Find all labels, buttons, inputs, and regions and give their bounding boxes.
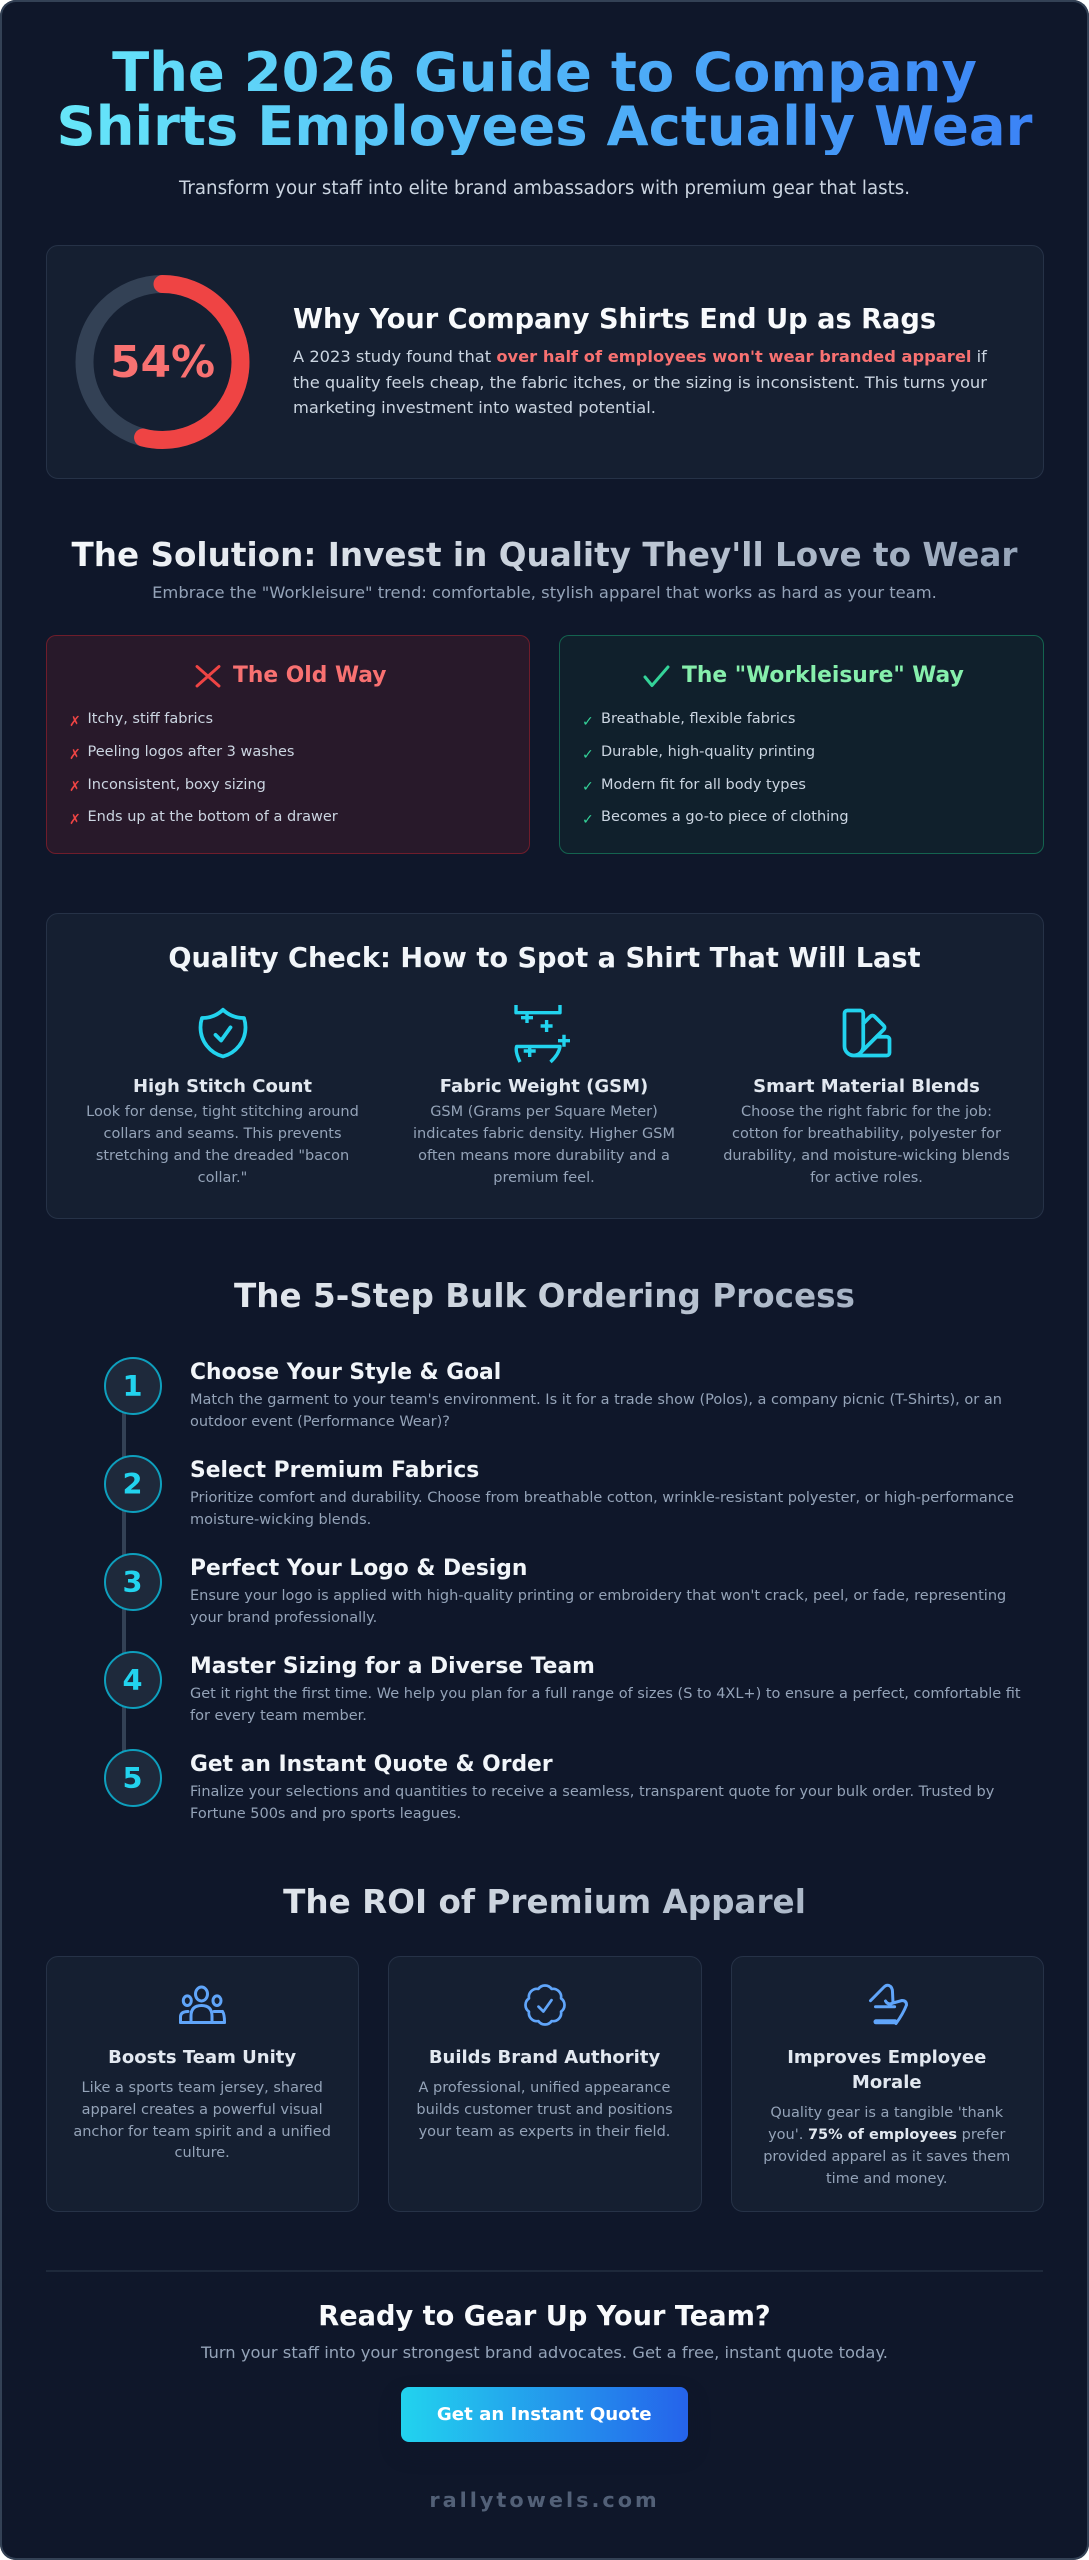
- list: old way items: ✗: [69, 779, 81, 795]
- list: workleisure items: ✓: [582, 779, 594, 795]
- text: boosts team unity description: culture.: [175, 2145, 230, 2161]
- text: smart material blends description: durability, and moisture-wicking blends: [723, 1148, 1010, 1164]
- list: workleisure items: [582, 711, 849, 828]
- icon: fabric weight: [514, 1005, 570, 1064]
- text: smart material blends description: for active roles.: [810, 1170, 923, 1186]
- text: fabric weight description: GSM (Grams per Square Meter): [430, 1104, 658, 1120]
- heading: why shirts end up as rags: Why Your Company Shirts End Up as Rags: [293, 304, 936, 335]
- heading: quality check: Quality Check: How to Spot a Shirt That Will Last: [168, 943, 921, 974]
- list: old way items: Peeling logos after 3 washes: [88, 744, 294, 760]
- chart: 54 percent ring: [76, 275, 250, 449]
- step 5: Finalize your selections and quantities to receive a seamless, transparent quote for your bulk order. Trusted by: [190, 1784, 994, 1800]
- icon: green check: [643, 665, 670, 688]
- heading: 5-step process: The 5-Step Bulk Ordering Process: [234, 1277, 855, 1315]
- text: high stitch count description: Look for dense, tight stitching around: [86, 1104, 359, 1120]
- text: smart material blends description: Choose the right fabric for the job:: [741, 1104, 992, 1120]
- text: smart material blends description: cotton for breathability, polyester for: [732, 1126, 1001, 1142]
- text: fabric weight description: often means more durability and a: [418, 1148, 670, 1164]
- list: workleisure items: ✓: [582, 714, 594, 730]
- card title: boosts team unity: Boosts Team Unity: [108, 2047, 296, 2068]
- list: old way items: ✗: [69, 714, 81, 730]
- text: builds brand authority description: A professional, unified appearance: [419, 2080, 670, 2096]
- list: workleisure items: Durable, high-quality printing: [601, 744, 815, 760]
- column: smart material blends: Smart Material Blends: [753, 1076, 980, 1097]
- step 2: Select Premium Fabrics: [190, 1458, 479, 1482]
- step 1: Choose Your Style & Goal: [190, 1360, 501, 1384]
- text: smart material blends description: [723, 1104, 1010, 1186]
- text: call to action subtitle: Turn your staff into your strongest brand advocates. Get a free, instant quote today.: [201, 2343, 888, 2362]
- card title: improves employee morale: Morale: [852, 2072, 922, 2093]
- text: solution subtitle: Embrace the "Workleisure" trend: comfortable, stylish apparel that works as hard as your team.: [152, 583, 937, 602]
- step 4: for every team member.: [190, 1708, 367, 1724]
- title: [46, 46, 1043, 154]
- text: improves employee morale description: time and money.: [826, 2171, 948, 2187]
- list: workleisure items: ✓: [582, 747, 594, 763]
- step 1: Match the garment to your team's environment. Is it for a trade show (Polos), a company picnic (T-Shirts), or an: [190, 1392, 1002, 1408]
- list: old way items: Itchy, stiff fabrics: [88, 711, 213, 727]
- list: workleisure items: Modern fit for all body types: [601, 777, 806, 793]
- list: old way items: [69, 711, 338, 828]
- text: problem description: [293, 347, 988, 417]
- heading: the solution: The Solution: Invest in Quality They'll Love to Wear: [72, 536, 1018, 574]
- text: high stitch count description: collars and seams. This prevents: [104, 1126, 342, 1142]
- step 1: outdoor event (Performance Wear)?: [190, 1414, 450, 1430]
- timeline connector: [122, 1386, 126, 1778]
- step 5: Fortune 500s and pro sports leagues.: [190, 1806, 461, 1822]
- list: workleisure items: Becomes a go-to piece of clothing: [601, 809, 849, 825]
- list: workleisure items: Breathable, flexible fabrics: [601, 711, 795, 727]
- card title: builds brand authority: Builds Brand Authority: [429, 2047, 660, 2068]
- footer: website: rallytowels.com: [429, 2488, 660, 2512]
- panel: the workleisure way: [559, 635, 1044, 854]
- step 2: moisture-wicking blends.: [190, 1512, 371, 1528]
- text: boosts team unity description: apparel creates a powerful visual: [82, 2102, 323, 2118]
- step 5: 5: [122, 1761, 143, 1795]
- title: The 2026 Guide to Company: [112, 41, 977, 104]
- column: high stitch count: High Stitch Count: [133, 1076, 312, 1097]
- text: improves employee morale description: [763, 2105, 1010, 2187]
- icon: thumbs up: [868, 1984, 908, 2026]
- step 4: Master Sizing for a Diverse Team: [190, 1654, 595, 1678]
- button: get an instant quote: Get an Instant Quote: [437, 2404, 652, 2425]
- list: old way items: Ends up at the bottom of a drawer: [88, 809, 338, 825]
- text: builds brand authority description: builds customer trust and positions: [416, 2102, 673, 2118]
- step 4: Get it right the first time. We help you plan for a full range of sizes (S to 4XL+) to ensure a perfect, comfortable fit: [190, 1686, 1021, 1702]
- step 3: Ensure your logo is applied with high-quality printing or embroidery that won't crack, peel, or fade, representing: [190, 1588, 1006, 1604]
- heading: the old way: The Old Way: [233, 663, 386, 688]
- panel: improves employee morale: [730, 1956, 1044, 2212]
- column: fabric weight: Fabric Weight (GSM): [440, 1076, 648, 1097]
- text: problem description: marketing investment into wasted potential.: [293, 398, 656, 417]
- card title: improves employee morale: Improves Employee: [787, 2047, 986, 2068]
- text: boosts team unity description: anchor for team spirit and a unified: [73, 2124, 331, 2140]
- text: fabric weight description: [413, 1104, 675, 1186]
- panel: builds brand authority: [388, 1956, 702, 2212]
- text: problem description: A 2023 study found that over half of employees won't wear branded apparel if: [293, 347, 987, 366]
- text: problem description: the quality feels cheap, the fabric itches, or the sizing is inconsistent. This turns your: [293, 373, 987, 392]
- title: Shirts Employees Actually Wear: [57, 95, 1032, 158]
- step 4: 4: [122, 1663, 143, 1697]
- step 3: your brand professionally.: [190, 1610, 377, 1626]
- step 3: 3: [122, 1565, 143, 1599]
- heading: 5-step process: [46, 1276, 1043, 1316]
- icon: team: [179, 1986, 226, 2024]
- card title: improves employee morale: [787, 2047, 986, 2093]
- text: improves employee morale description: Quality gear is a tangible 'thank: [770, 2105, 1003, 2121]
- step 2: Prioritize comfort and durability. Choose from breathable cotton, wrinkle-resistant polyester, or high-performance: [190, 1490, 1014, 1506]
- text: fabric weight description: indicates fabric density. Higher GSM: [413, 1126, 675, 1142]
- text: builds brand authority description: your team as experts in their field.: [419, 2124, 670, 2140]
- step 3: [104, 1553, 1006, 1626]
- step 3: Perfect Your Logo & Design: [190, 1556, 527, 1580]
- text: fabric weight description: premium feel.: [493, 1170, 595, 1186]
- step 4: [104, 1651, 1021, 1724]
- text: builds brand authority description: [416, 2080, 673, 2140]
- text: high stitch count description: stretching and the dreaded "bacon: [96, 1148, 349, 1164]
- heading: call to action: Ready to Gear Up Your Team?: [318, 2301, 771, 2332]
- step 1: [104, 1357, 1002, 1430]
- text: improves employee morale description: you'. 75% of employees prefer: [768, 2127, 1005, 2143]
- button: get an instant quote: [401, 2387, 688, 2442]
- step 2: [104, 1455, 1014, 1528]
- step 1: 1: [122, 1369, 143, 1403]
- panel: quality check: [46, 913, 1044, 1219]
- step 2: 2: [122, 1467, 143, 1501]
- text: boosts team unity description: Like a sports team jersey, shared: [82, 2080, 323, 2096]
- step 5: [104, 1749, 994, 1822]
- panel: boosts team unity: [46, 1956, 358, 2212]
- icon: shield check: [198, 1008, 248, 1058]
- list: workleisure items: ✓: [582, 812, 594, 828]
- icon: material swatches: [842, 1008, 892, 1058]
- list: old way items: ✗: [69, 812, 81, 828]
- ring value: 54%: 54%: [110, 336, 215, 388]
- subtitle: Transform your staff into elite brand ambassadors with premium gear that lasts.: [179, 178, 910, 199]
- text: boosts team unity description: [73, 2080, 331, 2161]
- list: old way items: ✗: [69, 747, 81, 763]
- panel: problem statistic: [46, 245, 1044, 479]
- text: improves employee morale description: provided apparel as it saves them: [763, 2149, 1010, 2165]
- heading: ROI: The ROI of Premium Apparel: [283, 1883, 806, 1921]
- icon: red cross: [196, 665, 220, 688]
- step 5: Get an Instant Quote & Order: [190, 1752, 553, 1776]
- list: old way items: Inconsistent, boxy sizing: [88, 777, 266, 793]
- panel: the old way: [46, 635, 530, 854]
- icon: check badge: [524, 1984, 566, 2026]
- heading: ROI: [46, 1882, 1043, 1922]
- text: high stitch count description: collar.": [198, 1170, 247, 1186]
- heading: the workleisure way: The "Workleisure" Way: [682, 663, 964, 688]
- text: high stitch count description: [86, 1104, 359, 1186]
